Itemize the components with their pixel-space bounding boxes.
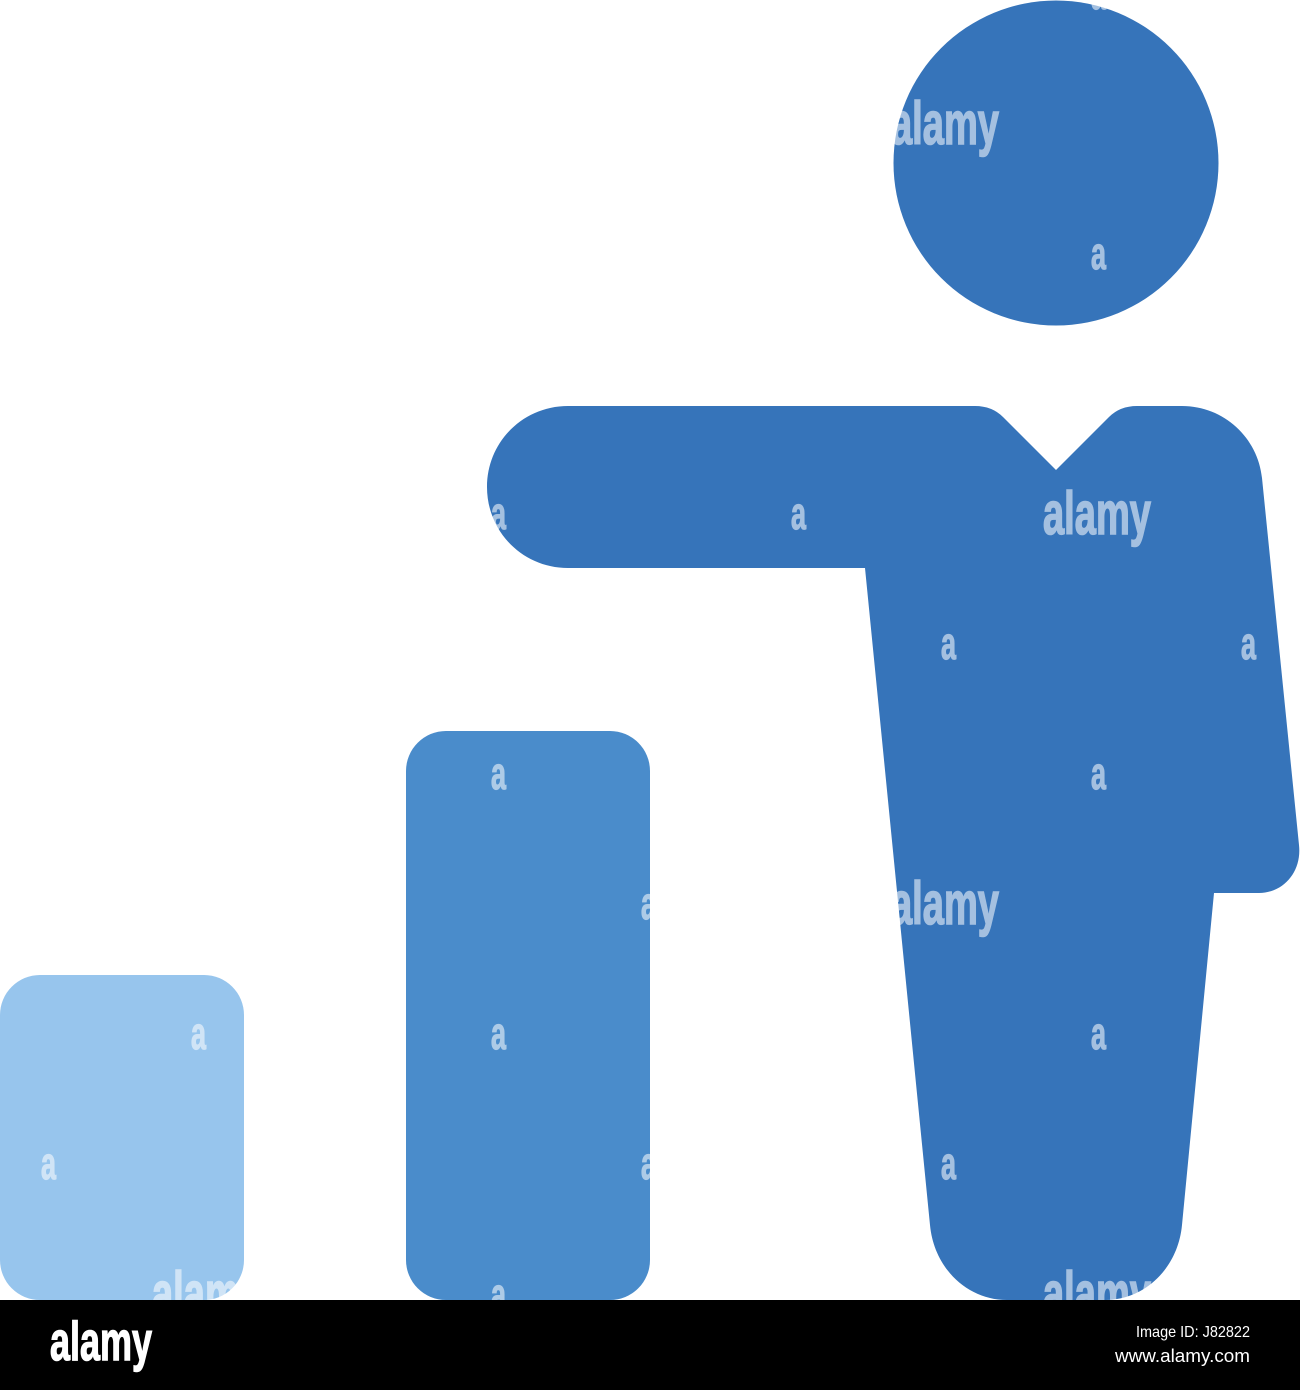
- watermark pattern: a: [41, 1138, 57, 1189]
- icon: person body with pointing arm: [487, 406, 1299, 1300]
- watermark pattern: a: [491, 1008, 507, 1059]
- footer logo: alamy: [50, 1310, 152, 1372]
- watermark pattern: a: [1091, 228, 1107, 279]
- watermark pattern: a: [491, 1269, 507, 1320]
- image id: Image ID: J82822: [1136, 1324, 1250, 1341]
- footer bar: [0, 1300, 1300, 1390]
- icon: medium blue bar: [406, 731, 650, 1300]
- website: www.alamy.com: [1114, 1346, 1250, 1366]
- watermark pattern: a: [641, 1138, 657, 1189]
- icon: person head: [894, 0, 1218, 326]
- watermark pattern: a: [1091, 748, 1107, 799]
- watermark pattern: a: [491, 748, 507, 799]
- watermark pattern: a: [1091, 1008, 1107, 1059]
- watermark pattern: a: [941, 618, 957, 669]
- watermark pattern: a: [641, 878, 657, 929]
- watermark pattern: a: [941, 1138, 957, 1189]
- watermark pattern: alamy: [891, 870, 999, 937]
- watermark pattern: a: [491, 488, 507, 539]
- watermark pattern: a: [1241, 618, 1257, 669]
- watermark pattern: alamy: [152, 1260, 260, 1327]
- watermark pattern: a: [191, 1008, 207, 1059]
- watermark pattern: alamy: [1043, 1260, 1151, 1327]
- watermark pattern: alamy: [891, 90, 999, 157]
- icon: small light blue bar: [0, 975, 244, 1300]
- watermark pattern: alamy: [1043, 480, 1151, 547]
- watermark pattern: a: [791, 488, 807, 539]
